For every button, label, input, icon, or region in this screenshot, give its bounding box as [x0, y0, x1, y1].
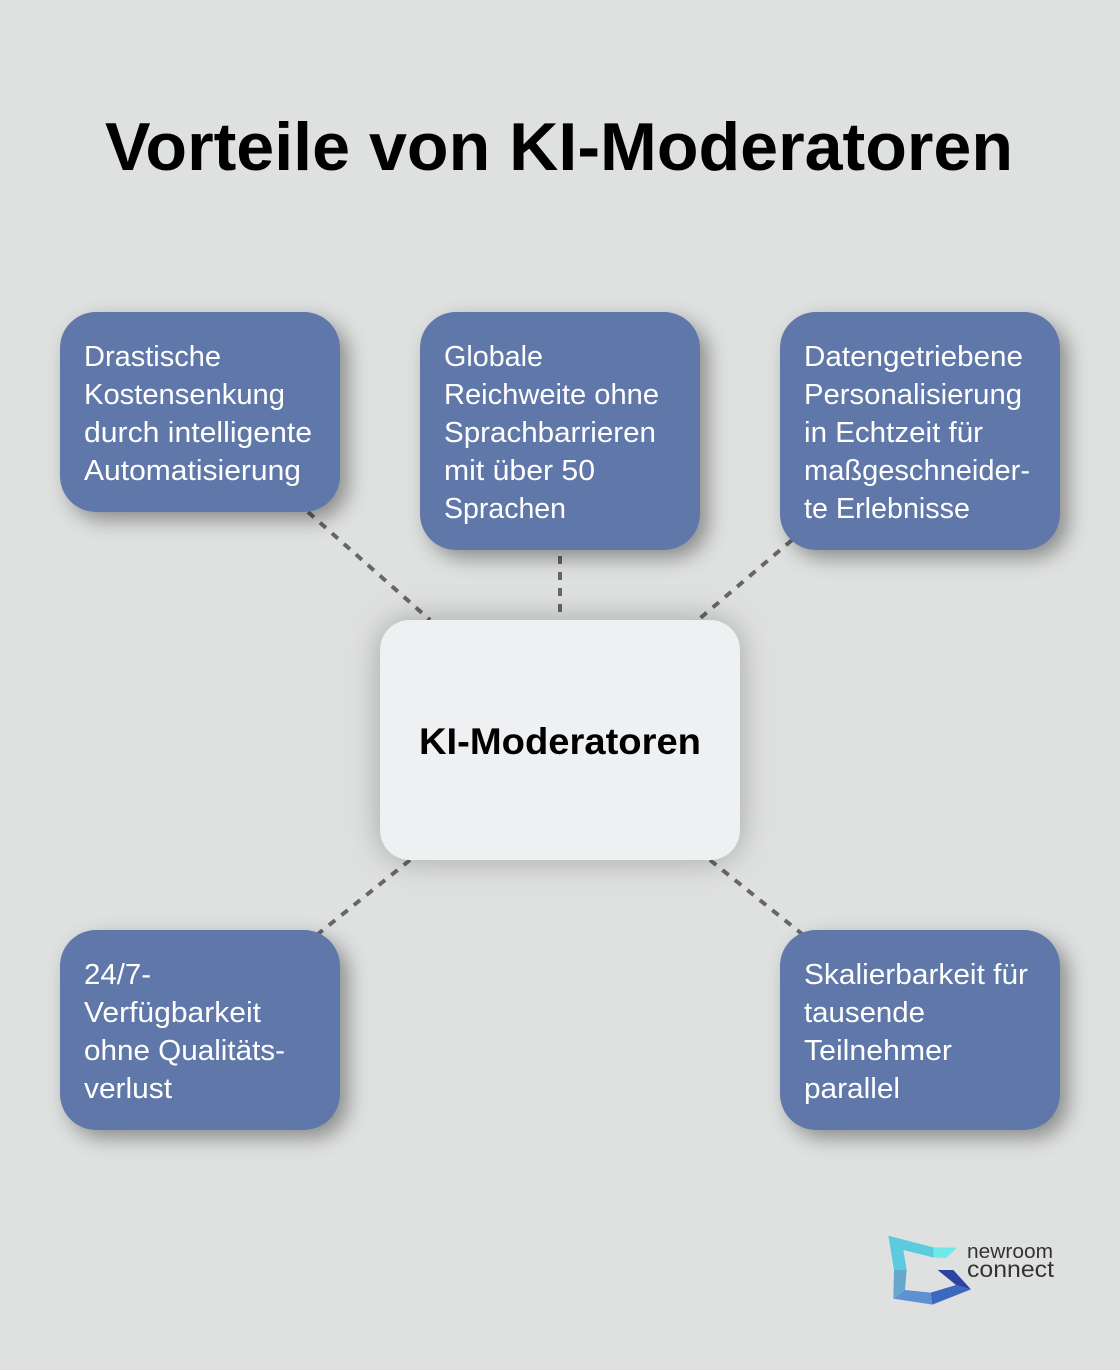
panel text: Globale Reichweite: mit über 50 — [444, 455, 595, 487]
panel text: Skalierbarkeit: Skalierbarkeit für — [804, 959, 1028, 991]
panel: center KI-Moderatoren — [380, 620, 740, 860]
logo: newroom connect — [888, 1236, 1055, 1305]
panel text: Verfügbarkeit: 24/7- — [84, 959, 151, 991]
logo wordmark — [967, 1241, 1055, 1282]
panel text: Skalierbarkeit — [804, 959, 1028, 1105]
panel text: Kostensenkung: Drastische — [84, 341, 221, 373]
panel text: Kostensenkung: durch intelligente — [84, 417, 312, 449]
panel: Kostensenkung — [60, 312, 340, 512]
panel text: Skalierbarkeit: parallel — [804, 1073, 900, 1105]
panel text: Personalisierung: Datengetriebene — [804, 341, 1023, 373]
logo mark — [888, 1236, 971, 1305]
logo wordmark: newroom — [967, 1241, 1053, 1263]
panel text: Globale Reichweite: Sprachbarrieren — [444, 417, 656, 449]
dashed connectors — [308, 512, 802, 934]
panel text: Personalisierung: in Echtzeit für — [804, 417, 983, 449]
panel text: Globale Reichweite: Reichweite ohne — [444, 379, 659, 411]
panel text: Globale Reichweite — [444, 341, 659, 525]
panel: Verfügbarkeit — [60, 930, 340, 1130]
panel: Skalierbarkeit — [780, 930, 1060, 1130]
panel text: Verfügbarkeit — [84, 959, 285, 1105]
panel text: Skalierbarkeit: Teilnehmer — [804, 1035, 952, 1067]
center label: KI-Moderatoren — [419, 721, 701, 762]
panel text: Globale Reichweite: Globale — [444, 341, 543, 373]
panel text: Personalisierung: maßgeschneider- — [804, 455, 1030, 487]
panel text: Verfügbarkeit: verlust — [84, 1073, 172, 1105]
panel text: Kostensenkung — [84, 341, 312, 487]
panel: Personalisierung — [780, 312, 1060, 550]
panel text: Personalisierung — [804, 341, 1030, 525]
panel text: Kostensenkung: Kostensenkung — [84, 379, 285, 411]
logo wordmark: connect — [967, 1256, 1055, 1282]
panel text: Personalisierung: te Erlebnisse — [804, 493, 970, 525]
panel text: Verfügbarkeit: ohne Qualitäts- — [84, 1035, 285, 1067]
title: Vorteile von KI-Moderatoren — [105, 109, 1013, 185]
panel text: Globale Reichweite: Sprachen — [444, 493, 566, 525]
panel: Globale Reichweite — [420, 312, 700, 550]
panel text: Verfügbarkeit: Verfügbarkeit — [84, 997, 261, 1029]
panel text: Personalisierung: Personalisierung — [804, 379, 1022, 411]
panel text: Skalierbarkeit: tausende — [804, 997, 925, 1029]
panel text: Kostensenkung: Automatisierung — [84, 455, 301, 487]
